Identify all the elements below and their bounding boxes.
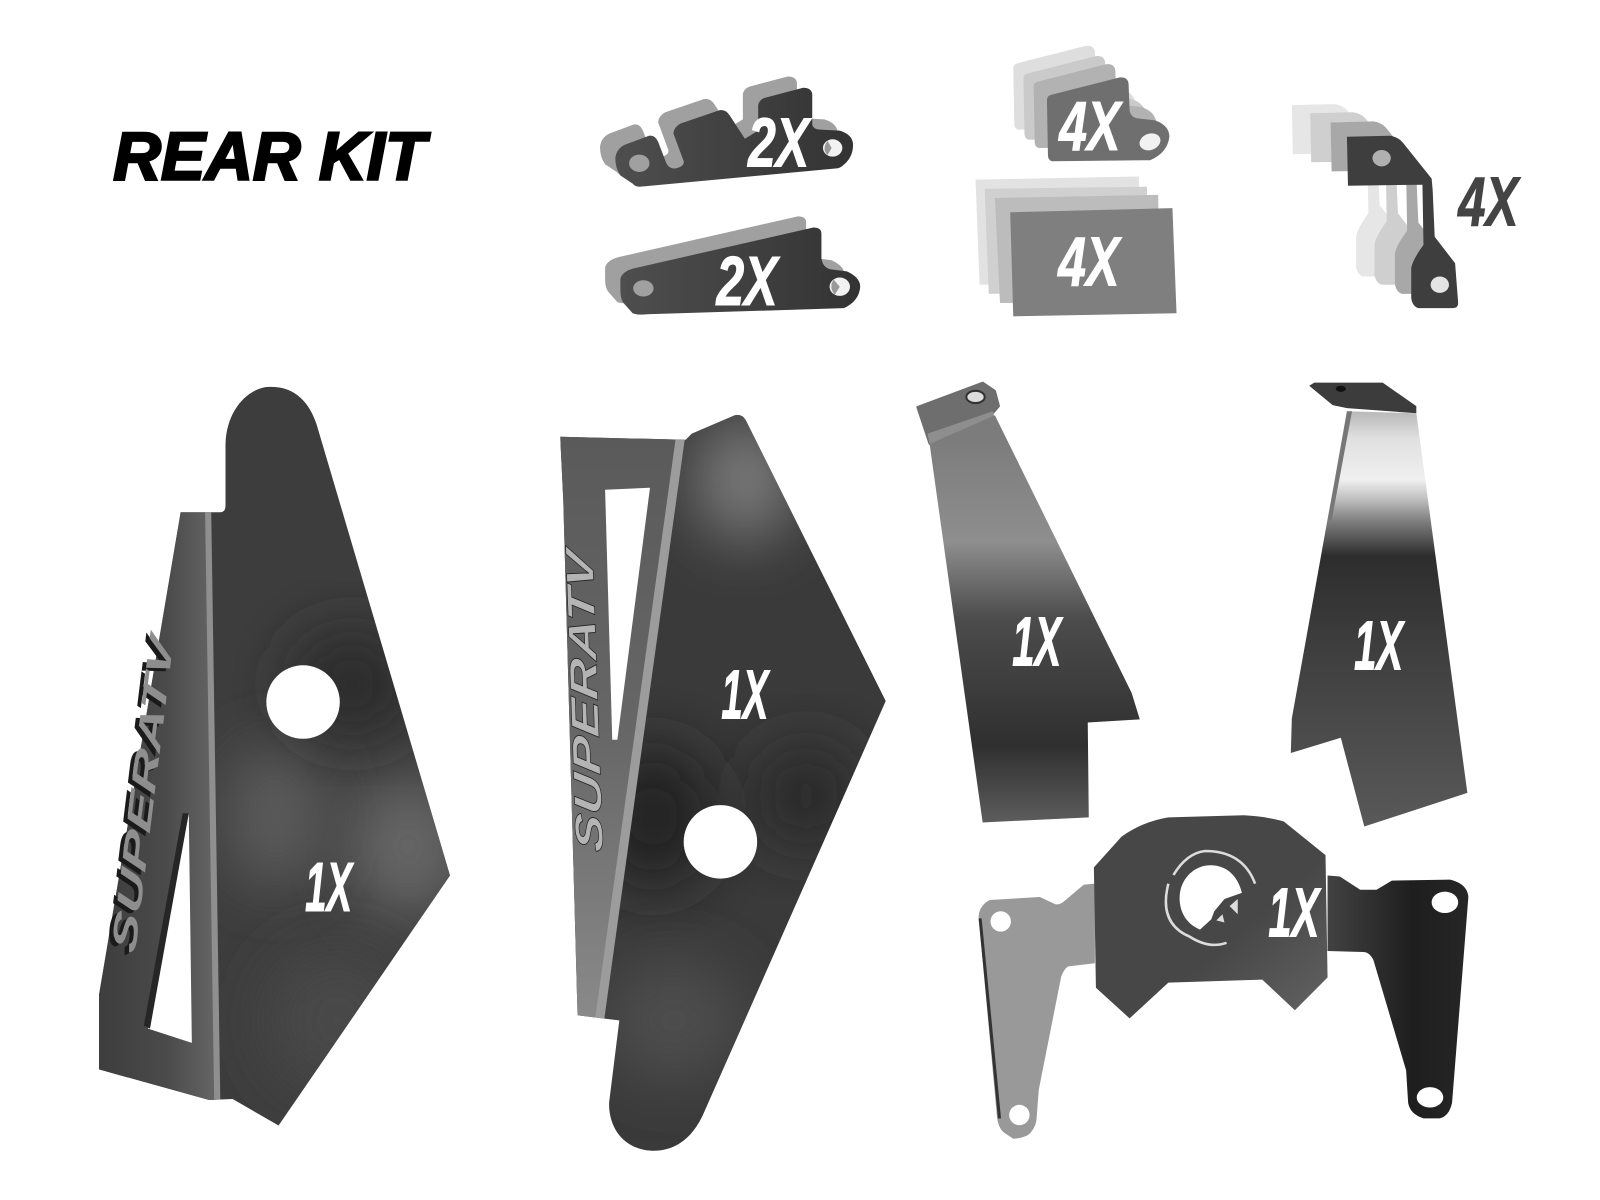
part: lower sloped bracket 2X	[605, 216, 860, 320]
brand lettering	[101, 626, 182, 961]
quantity label: 1X	[305, 848, 354, 926]
part: small tab plate 4X	[1013, 46, 1169, 165]
logo cutout	[1166, 851, 1255, 945]
part: tall plate with tab (right)	[1291, 383, 1467, 827]
part: upper notched bracket 2X	[600, 77, 853, 187]
quantity label: 1X	[1268, 874, 1322, 952]
part: large left gusset plate	[92, 378, 469, 1133]
part: large centre gusset plate	[551, 408, 898, 1163]
brand lettering: SUPERATV	[105, 627, 182, 957]
right arm	[1328, 876, 1468, 1118]
part: square plate 4X: 4X	[1057, 223, 1122, 301]
part: small tab plate 4X: 4X	[1058, 87, 1123, 165]
brand lettering: SUPERATV	[559, 544, 612, 854]
triangular cutout	[148, 813, 192, 1043]
part: lower sloped bracket 2X: 2X	[715, 242, 780, 320]
part: square plate 4X	[976, 177, 1177, 316]
part: upper notched bracket 2X: 2X	[747, 103, 812, 181]
part: lower mount bracket	[979, 815, 1468, 1139]
title: REAR KIT	[113, 120, 430, 195]
quantity label: 1X	[1012, 602, 1063, 680]
part: angled arm 4X: 4X	[1457, 163, 1521, 241]
brand lettering: SUPERATV	[101, 630, 177, 960]
triangular cutout	[605, 488, 650, 740]
hole: circular cutout	[266, 665, 340, 739]
hole: circular cutout	[684, 805, 757, 879]
centre plate	[1094, 815, 1328, 1018]
quantity label: 1X	[1354, 606, 1405, 684]
part: tall plate with tab (left)	[917, 383, 1140, 822]
part: angled arm 4X	[1292, 104, 1521, 308]
left arm	[979, 884, 1095, 1139]
triangle inner edge	[144, 813, 189, 1029]
quantity label: 1X	[721, 655, 770, 733]
